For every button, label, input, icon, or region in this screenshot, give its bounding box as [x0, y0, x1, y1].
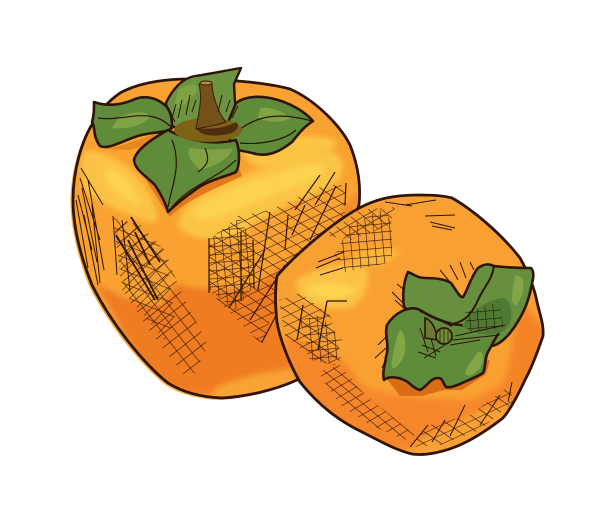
persimmon: back [70, 79, 362, 402]
calyx: back [92, 68, 313, 212]
offset rim shadow [70, 81, 357, 400]
hatch: left lower [113, 216, 208, 382]
back shadow under calyx [138, 165, 242, 217]
leaf veins [98, 116, 312, 207]
calyx centre [174, 118, 242, 142]
leaf hatch [465, 302, 503, 332]
back outline [73, 79, 360, 398]
front body [276, 195, 543, 455]
stem [196, 82, 226, 129]
front hatch: top [316, 200, 455, 275]
leaf fold lines [420, 266, 494, 326]
leaf highlights [112, 85, 290, 170]
calyx: front [375, 262, 533, 390]
leaf hatch halo [375, 262, 474, 368]
front leaf shadow [386, 360, 490, 396]
calyx hatch [170, 95, 238, 122]
rear leaf [403, 264, 533, 346]
hatch: centre right [209, 172, 346, 345]
front shading [285, 247, 545, 460]
leaf highlights [392, 275, 524, 375]
front hatch: bottom right [410, 382, 513, 447]
top leaf [166, 68, 241, 135]
front hatch: bottom left [318, 365, 415, 440]
hatch: left edge [76, 168, 104, 285]
dark leaf patch [462, 298, 511, 335]
persimmon: front [276, 195, 545, 460]
fore leaf [383, 308, 500, 390]
illustration: two persimmons [70, 66, 545, 456]
back body [73, 79, 360, 398]
front outline [276, 195, 543, 455]
right leaf [225, 97, 313, 155]
calyx scar [425, 318, 438, 340]
front hatch: left [279, 293, 347, 365]
left leaf [92, 97, 172, 147]
lower leaf [134, 130, 239, 212]
back shading [81, 136, 362, 402]
